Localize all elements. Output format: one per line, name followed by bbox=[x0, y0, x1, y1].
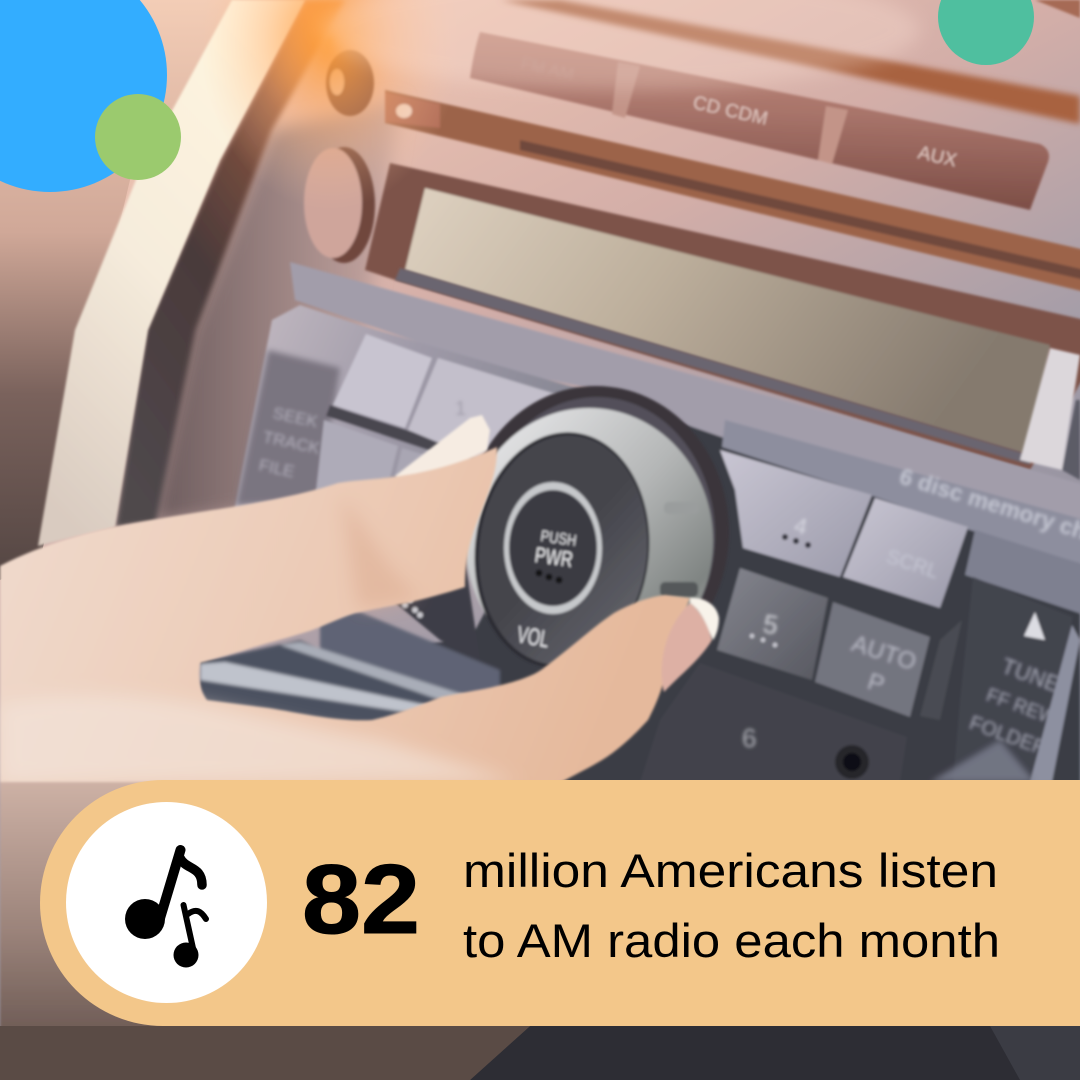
lower right dark body bbox=[200, 395, 1080, 1080]
preset button strip: FM AM bbox=[519, 53, 576, 84]
push power button: PWR bbox=[533, 542, 574, 572]
button 5: 5 bbox=[761, 608, 780, 640]
upper right light panel bbox=[965, 530, 1080, 615]
decorative circle: green bbox=[95, 94, 181, 180]
lower left vent strips bbox=[200, 612, 500, 740]
palm highlight bbox=[0, 696, 520, 782]
decorative circle: blue bbox=[0, 0, 167, 192]
button 1: 1 bbox=[455, 398, 466, 420]
dark dashboard edge band bbox=[115, 0, 345, 528]
button auto p: AUTO bbox=[848, 630, 919, 676]
seek track panel: TRACK bbox=[261, 427, 322, 458]
hazy highlight bbox=[320, 0, 920, 90]
tune panel: TUNE bbox=[998, 653, 1063, 697]
button auto p: P bbox=[864, 668, 888, 699]
button 4 bbox=[720, 450, 872, 577]
hand below banner bbox=[0, 782, 560, 1080]
banner: statistic bbox=[40, 780, 1080, 1026]
band with 6 disc memory text bbox=[722, 420, 1080, 565]
left rounded button bbox=[304, 147, 375, 263]
button rom bbox=[316, 420, 398, 492]
side button bbox=[920, 620, 962, 720]
bottom dark dashboard bbox=[470, 1026, 1080, 1080]
button 1 bbox=[408, 358, 562, 460]
banner background bbox=[40, 780, 1080, 1026]
button scrl bbox=[843, 498, 968, 608]
disc slot bbox=[385, 90, 1080, 292]
divider under top buttons bbox=[326, 405, 555, 490]
seek track panel bbox=[236, 350, 340, 505]
volume knob bbox=[463, 386, 729, 678]
index fingernail bbox=[395, 415, 490, 482]
statistic description bbox=[463, 844, 1000, 967]
decorative circle: teal bbox=[938, 0, 1034, 65]
hand bbox=[0, 415, 719, 1080]
tune panel: FOLDER bbox=[966, 712, 1050, 760]
orange sun flare bbox=[200, 0, 460, 210]
seek track panel: SEEK bbox=[271, 403, 320, 431]
button auto p bbox=[815, 602, 930, 717]
cream dashboard trim bbox=[38, 0, 305, 546]
preset button strip bbox=[470, 32, 1049, 210]
statistic number: 82 bbox=[302, 844, 420, 954]
under finger dark panel bbox=[380, 560, 480, 660]
seek track panel: FILE bbox=[257, 455, 296, 481]
statistic description: million Americans listen bbox=[463, 844, 998, 897]
button 6: 6 bbox=[742, 723, 756, 753]
left interior area bbox=[0, 0, 240, 580]
display screen bbox=[405, 188, 1050, 455]
lower left fascia bbox=[210, 305, 600, 640]
icon circle bbox=[66, 802, 267, 1003]
radio upper fascia bbox=[304, 0, 1080, 470]
preset button strip: CD CDM bbox=[691, 92, 770, 130]
thumb nail bbox=[690, 598, 719, 640]
finger shading bbox=[340, 495, 420, 610]
radio lower fascia bbox=[200, 262, 1080, 1080]
display recess bbox=[365, 163, 1080, 470]
gap between trim and fascia bbox=[150, 100, 400, 525]
statistic description: to AM radio each month bbox=[463, 914, 1000, 967]
button scrl: SCRL bbox=[883, 546, 941, 583]
button 5 bbox=[717, 568, 828, 680]
top groove bbox=[500, 0, 1080, 124]
preset button strip: AUX bbox=[916, 142, 959, 172]
icon: music notes bbox=[125, 850, 206, 968]
button scan bbox=[333, 334, 432, 428]
push power button bbox=[504, 482, 602, 614]
push power button: PUSH bbox=[539, 528, 577, 550]
hand and index finger bbox=[0, 447, 690, 782]
button 4: 4 bbox=[792, 513, 810, 540]
vol label: VOL bbox=[515, 621, 551, 653]
round knob top left bbox=[326, 50, 374, 116]
display side trim bbox=[1020, 348, 1080, 470]
tune panel: FF REW bbox=[983, 685, 1059, 730]
button 6 bbox=[640, 663, 907, 782]
tune panel bbox=[953, 577, 1073, 782]
